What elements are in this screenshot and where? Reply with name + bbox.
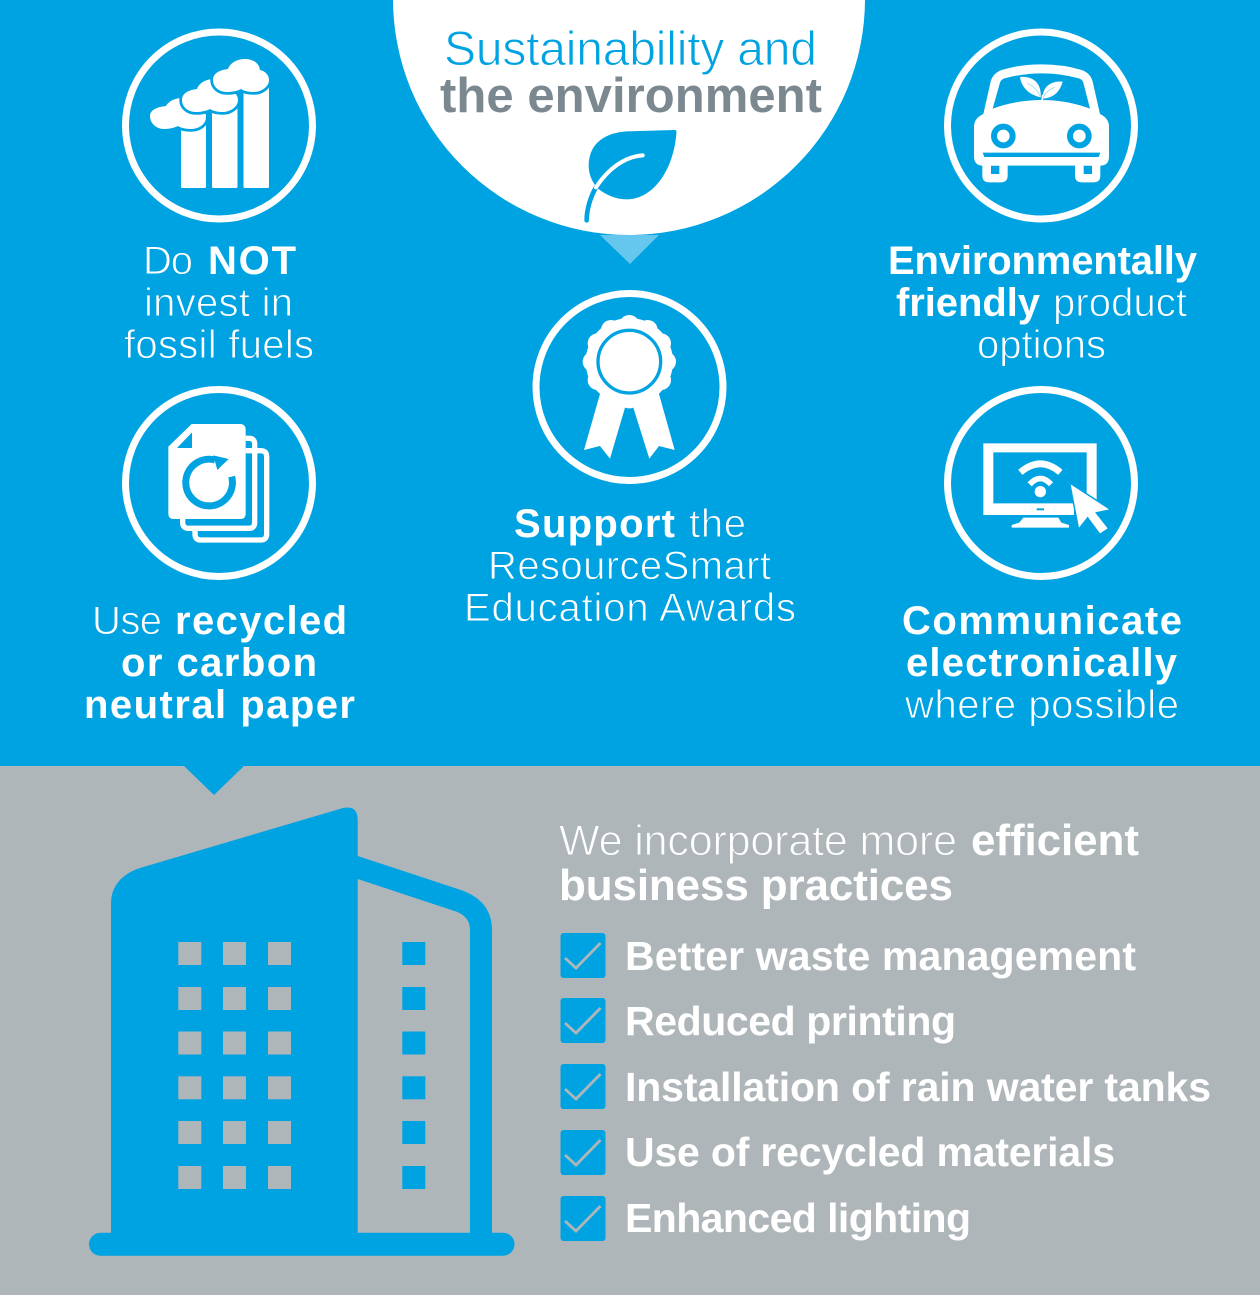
text: Do NOT invest in fossil fuels: fossil fuels — [124, 323, 314, 367]
item: Better waste management: Better waste management — [625, 933, 1136, 979]
text: Environmentally friendly product options: options — [977, 323, 1106, 367]
text: Support the ResourceSmart Education Awards: Education Awards — [464, 586, 796, 630]
text: Environmentally friendly product options: product — [1053, 281, 1187, 325]
icon: recycled paper stack — [126, 390, 312, 576]
heading: We incorporate more efficient business practices: We incorporate more — [559, 817, 957, 865]
title: Sustainability and the environment: the environment — [440, 69, 822, 123]
text: Use recycled or carbon neutral paper: recycled — [175, 599, 347, 643]
text: Do NOT invest in fossil fuels: NOT — [208, 239, 296, 283]
text: Support the ResourceSmart Education Awards: Support — [514, 502, 675, 546]
text: Environmentally friendly product options: friendly — [896, 281, 1041, 325]
heading: We incorporate more efficient business practices: efficient — [971, 816, 1139, 865]
title: Sustainability and the environment: Sustainability and — [444, 23, 817, 76]
text: Support the ResourceSmart Education Awards: the — [689, 502, 746, 546]
text: Communicate electronically where possible: Communicate — [902, 599, 1182, 643]
icon: leaf — [587, 130, 676, 220]
icon: office building — [89, 808, 514, 1256]
icon: chimneys with smoke clouds — [126, 32, 312, 219]
item: Enhanced lighting: Enhanced lighting — [625, 1195, 971, 1241]
text: Environmentally friendly product options: Environmentally — [888, 239, 1198, 283]
heading: We incorporate more efficient business practices — [559, 816, 1139, 910]
text: Do NOT invest in fossil fuels: Do — [143, 239, 193, 283]
text: Use recycled or carbon neutral paper: neutral paper — [84, 683, 355, 727]
text: Support the ResourceSmart Education Awards — [464, 502, 796, 630]
text: Communicate electronically where possible: where possible — [904, 683, 1179, 727]
text: Use recycled or carbon neutral paper: Use — [92, 599, 162, 643]
text: Communicate electronically where possible — [902, 599, 1182, 727]
arrow: pointer into grey section — [184, 766, 244, 795]
panel: grey business practices section — [0, 766, 1260, 1295]
text: Do NOT invest in fossil fuels: invest in — [144, 281, 293, 325]
text: Do NOT invest in fossil fuels — [124, 239, 314, 367]
text: Environmentally friendly product options — [888, 239, 1198, 367]
header circle with title — [393, 0, 865, 235]
title: Sustainability and the environment — [440, 23, 822, 123]
list: checklist of efficient practices — [560, 933, 1211, 1241]
heading: We incorporate more efficient business practices: business practices — [559, 861, 953, 910]
icon: award rosette — [536, 294, 723, 480]
item: Reduced printing: Reduced printing — [625, 998, 956, 1044]
text: Communicate electronically where possible: electronically — [906, 641, 1178, 685]
item: Installation of rain water tanks: Installation of rain water tanks — [625, 1064, 1211, 1110]
icon: monitor with wifi and cursor — [948, 390, 1134, 576]
text: Support the ResourceSmart Education Awards: ResourceSmart — [488, 544, 771, 588]
text: Use recycled or carbon neutral paper: or carbon — [121, 641, 317, 685]
item: Use of recycled materials: Use of recycled materials — [625, 1129, 1115, 1175]
arrow: pointer under header circle — [600, 235, 659, 264]
icon: car with plant — [948, 32, 1134, 219]
text: Use recycled or carbon neutral paper — [84, 599, 355, 727]
